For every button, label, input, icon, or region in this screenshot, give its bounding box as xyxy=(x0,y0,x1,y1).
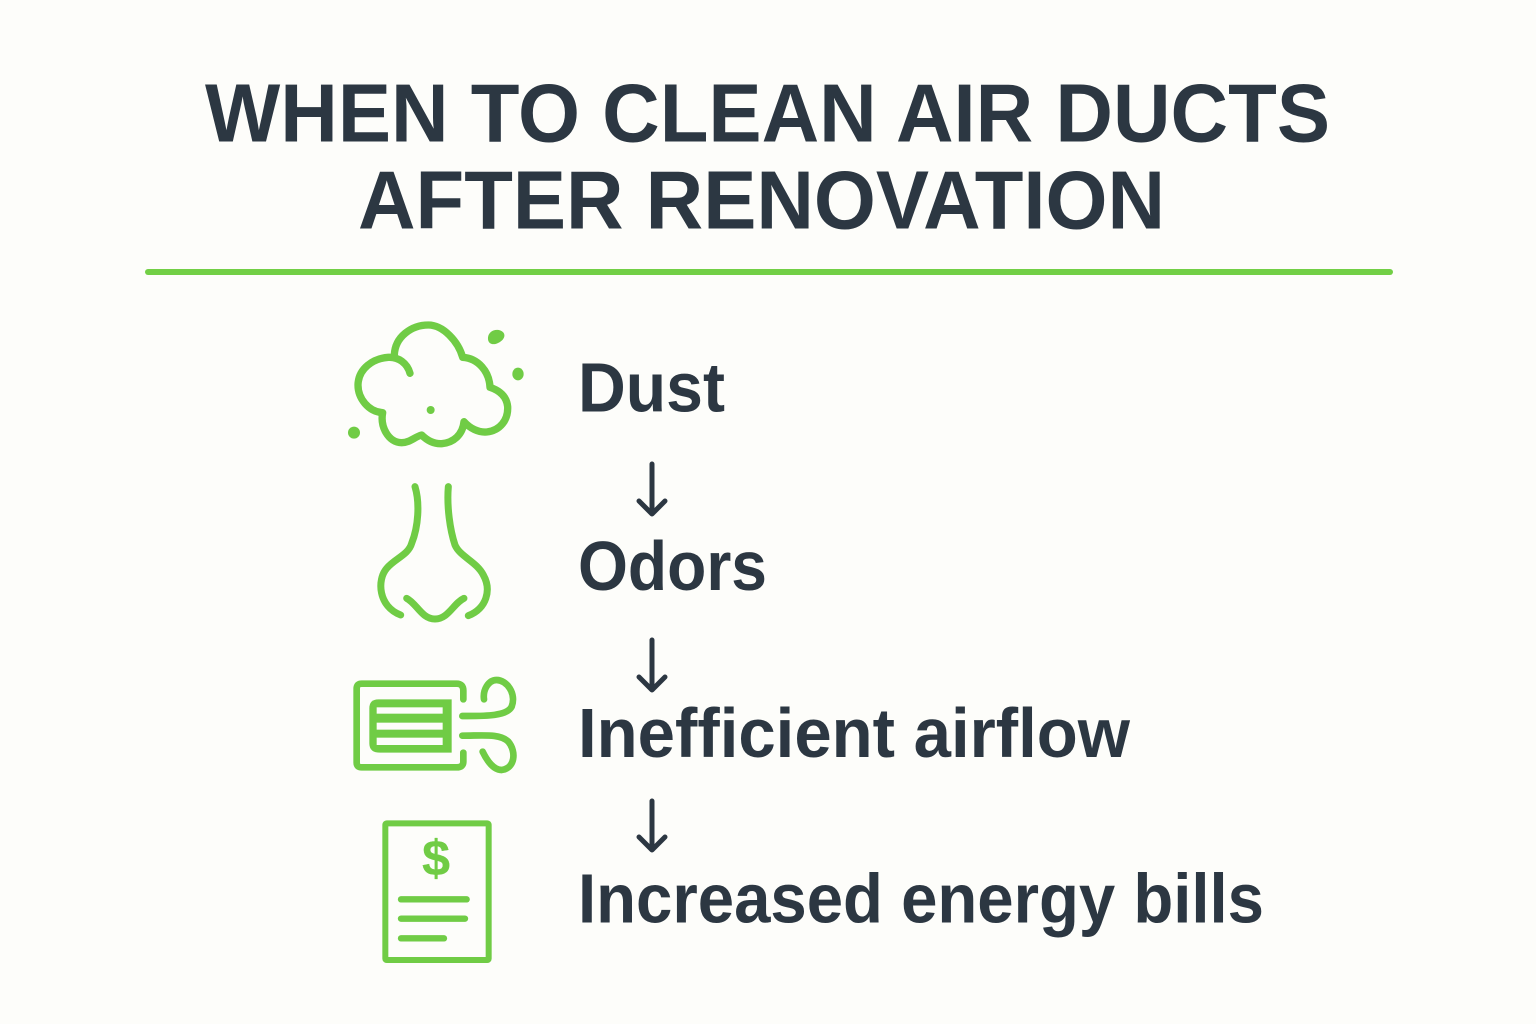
title: WHEN TO CLEAN AIR DUCTS xyxy=(205,66,1330,160)
icon: dust cloud xyxy=(348,325,524,444)
arrow: inefficient airflow to increased energy bills xyxy=(639,801,665,850)
arrow: dust to odors xyxy=(639,464,665,514)
label: Increased energy bills: Increased energy bills xyxy=(578,860,1264,938)
icon: energy bill: $ xyxy=(422,831,450,887)
icon: nose xyxy=(381,487,487,619)
label: Inefficient airflow: Inefficient airflow xyxy=(578,694,1131,772)
icon: energy bill xyxy=(385,823,489,960)
label: Odors: Odors xyxy=(578,527,767,605)
arrow: odors to inefficient airflow xyxy=(639,640,665,690)
title: AFTER RENOVATION xyxy=(358,154,1165,246)
icon: air vent with airflow xyxy=(357,680,513,770)
green divider under title xyxy=(148,269,1390,275)
title xyxy=(205,66,1330,246)
label: Dust: Dust xyxy=(578,348,725,426)
